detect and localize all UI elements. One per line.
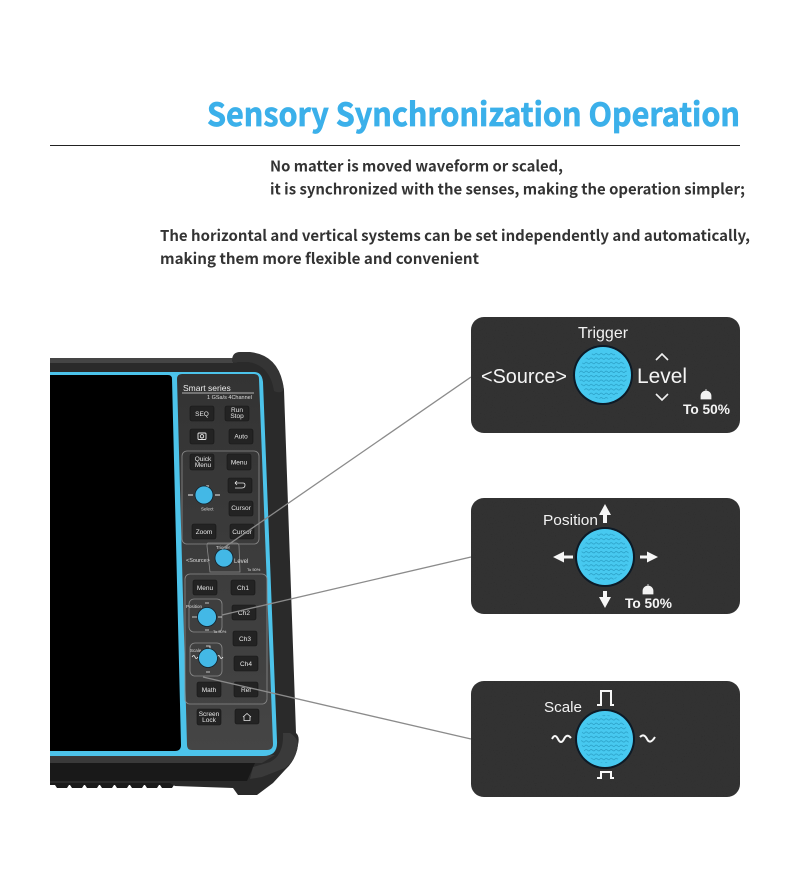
button labels: Cursor (232, 529, 253, 536)
trigger knob (573, 345, 633, 405)
control panel (177, 374, 273, 750)
to 50 percent: To 50% (683, 401, 731, 417)
buttons (190, 406, 259, 725)
button labels: Ch4 (240, 661, 252, 668)
device body (50, 358, 299, 795)
button labels: Quick (195, 456, 212, 463)
button labels: Auto (234, 434, 248, 440)
panel: scale (471, 681, 740, 797)
button labels: Zoom (196, 529, 212, 536)
text block: systems: making them more flexible and convenient (160, 248, 480, 269)
button labels: Menu (195, 462, 212, 469)
button labels: Ch1 (237, 585, 249, 592)
small knob labels: Trigger (216, 545, 231, 550)
to 50 percent (683, 389, 731, 417)
text block: intro: it is synchronized with the senses, making the operation simpler; (270, 178, 745, 200)
button labels: Math (202, 687, 217, 694)
button group outlines (182, 451, 267, 704)
button labels: Menu (231, 460, 248, 466)
position label: Position (543, 512, 598, 529)
small knob labels: Level (234, 559, 248, 565)
panel brand: Smart series (183, 383, 231, 393)
panel: trigger (471, 317, 740, 433)
text block: intro (270, 156, 745, 200)
text block: systems: The horizontal and vertical systems can be set independently and automatically, (160, 225, 750, 246)
button labels: Ref (241, 687, 251, 694)
level label: Level (637, 364, 687, 388)
corner bumper: top (232, 352, 284, 392)
scale label: Scale (544, 699, 582, 716)
scale knob (575, 709, 635, 769)
button labels: Cursor (231, 505, 252, 512)
text block: systems (160, 225, 750, 269)
button labels: Run (231, 407, 243, 414)
icon: camera (198, 433, 206, 440)
button labels: Lock (202, 717, 217, 724)
button labels: Menu (197, 585, 214, 592)
icon: return (235, 481, 245, 488)
small knob labels: Scale (190, 648, 202, 653)
screen (50, 375, 181, 751)
position knob (575, 527, 635, 587)
small knob labels (186, 486, 261, 672)
button labels: Screen (199, 711, 220, 718)
leader lines (203, 377, 471, 739)
position arrows (553, 504, 658, 608)
panel brand: 1 GSa/s 4Channel (207, 395, 252, 401)
corner bumper: bottom (250, 733, 298, 779)
text block: intro: No matter is moved waveform or scaled, (270, 156, 563, 176)
button labels: Stop (230, 413, 244, 420)
small knob labels: To 50% (247, 567, 261, 572)
icon: home (243, 714, 251, 720)
trigger label: Trigger (578, 325, 629, 342)
device: oscilloscope (50, 352, 299, 795)
cyan trim (50, 372, 277, 756)
device knobs (195, 486, 233, 668)
to 50 percent: To 50% (625, 595, 673, 611)
panel brand (182, 383, 254, 401)
level chevrons (656, 354, 668, 400)
button labels (195, 407, 253, 724)
waveform icons (552, 691, 655, 778)
panel: position (471, 498, 740, 614)
small knob labels: <Source> (186, 558, 210, 564)
source label: <Source> (481, 365, 567, 388)
device bottom ridges (50, 780, 178, 788)
small knob labels: To 50% (213, 629, 227, 634)
button labels: SEQ (195, 411, 209, 418)
title: Sensory Synchronization Operation (207, 90, 740, 136)
small knob labels: Select (201, 506, 214, 512)
button labels: Ch2 (238, 610, 250, 617)
to 50 percent (625, 584, 673, 611)
small knob labels: Position (186, 604, 203, 609)
button labels: Ch3 (239, 636, 251, 643)
